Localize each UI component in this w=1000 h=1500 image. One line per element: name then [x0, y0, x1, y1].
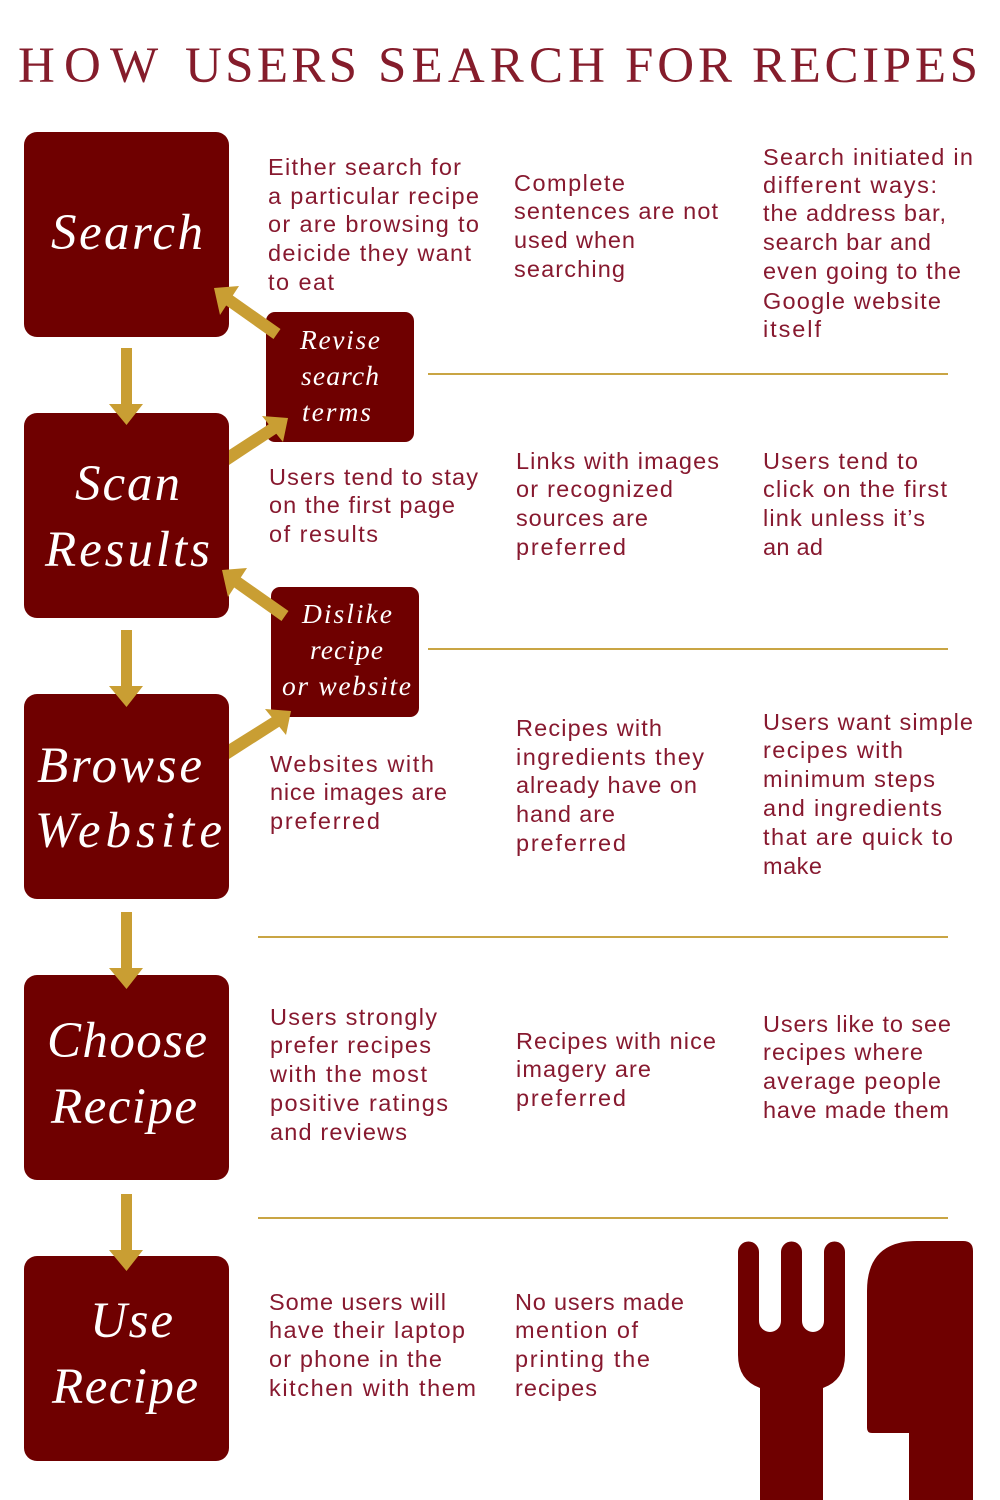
- text: search intent: Either search for: [268, 154, 461, 180]
- text: ingredients on hand: ingredients they: [516, 744, 704, 770]
- text: nice images: preferred: [270, 808, 380, 834]
- text: search initiation: the address bar,: [763, 200, 946, 226]
- arrow: Browse Website to Choose Recipe: [109, 912, 143, 989]
- text: first page: of results: [269, 521, 378, 547]
- icon: knife: [867, 1241, 973, 1500]
- text: simple recipes: Users want simple: [763, 709, 973, 735]
- step box: Choose Recipe: Recipe: [50, 1079, 197, 1135]
- step box: Browse Website: Website: [35, 803, 222, 859]
- text: simple recipes: recipes with: [763, 737, 903, 763]
- text: search intent: to eat: [268, 269, 334, 295]
- text: nice imagery: preferred: [516, 1085, 626, 1111]
- panel: Revise search terms: terms: [302, 396, 371, 427]
- text: links with images: Links with images: [516, 448, 719, 474]
- arrow: Choose Recipe to Use Recipe: [109, 1194, 143, 1271]
- step box: Scan Results: Results: [44, 522, 210, 578]
- text: search sentences: used when: [514, 227, 635, 253]
- title: USERS: [185, 38, 357, 94]
- text: first link: click on the first: [763, 476, 947, 502]
- text: average people: [763, 1011, 951, 1123]
- text: search initiation: different ways:: [763, 172, 937, 198]
- text: average people: have made them: [763, 1097, 949, 1123]
- panel: Revise search terms: search: [301, 360, 379, 391]
- panel: Revise search terms: [266, 312, 414, 442]
- text: nice imagery: Recipes with nice: [516, 1028, 716, 1054]
- title: FOR: [625, 38, 732, 94]
- text: laptop in kitchen: kitchen with them: [269, 1375, 476, 1401]
- text: no printing: printing the: [515, 1346, 650, 1372]
- text: laptop in kitchen: Some users will: [269, 1289, 446, 1315]
- text: ratings and reviews: [269, 1004, 448, 1145]
- text: search sentences: Complete: [514, 170, 625, 196]
- text: ingredients on hand: already have on: [516, 772, 697, 798]
- text: simple recipes: make: [763, 853, 822, 879]
- text: ingredients on hand: preferred: [516, 830, 626, 856]
- text: average people: Users like to see: [763, 1011, 951, 1037]
- text: first page: [269, 464, 478, 547]
- text: no printing: No users made: [515, 1289, 684, 1315]
- text: average people: average people: [763, 1068, 941, 1094]
- title: RECIPES: [752, 38, 978, 94]
- title: HOW: [18, 38, 159, 94]
- text: nice imagery: [516, 1028, 716, 1111]
- text: nice images: Websites with: [270, 751, 434, 777]
- text: search sentences: [514, 170, 718, 282]
- step box: Scan Results: Scan: [75, 456, 180, 512]
- text: first page: Users tend to stay: [269, 464, 478, 490]
- text: first link: Users tend to: [763, 448, 918, 474]
- text: simple recipes: that are quick to: [763, 824, 953, 850]
- arrow: Scan Results to Browse Website: [109, 630, 143, 707]
- text: laptop in kitchen: [269, 1289, 476, 1401]
- title: SEARCH: [378, 38, 605, 94]
- text: nice imagery: imagery are: [516, 1056, 651, 1082]
- text: search intent: or are browsing to: [268, 211, 479, 237]
- text: links with images: sources are: [516, 505, 648, 531]
- text: search initiation: Google website: [763, 288, 941, 314]
- text: search initiation: even going to the: [763, 258, 961, 284]
- step box: Choose Recipe: Choose: [47, 1013, 207, 1069]
- text: ratings and reviews: and reviews: [270, 1119, 407, 1145]
- text: simple recipes: minimum steps: [763, 766, 935, 792]
- text: average people: recipes where: [763, 1039, 923, 1065]
- text: ingredients on hand: hand are: [516, 801, 615, 827]
- step box: Search: [24, 132, 229, 337]
- text: search sentences: searching: [514, 256, 625, 282]
- text: search intent: deicide they want: [268, 240, 471, 266]
- panel: Revise search terms: Revise: [299, 324, 380, 355]
- step box: Search: Search: [51, 205, 203, 261]
- text: simple recipes: [763, 709, 973, 879]
- arrow: Scan Results to Revise: [229, 416, 288, 465]
- text: search initiation: [763, 144, 973, 342]
- arrow: Browse Website to Dislike: [229, 709, 291, 759]
- text: ratings and reviews: prefer recipes: [270, 1032, 431, 1058]
- step box: Scan Results: [24, 413, 229, 618]
- step box: Browse Website: [24, 694, 229, 899]
- panel: Dislike recipe or website: Dislike: [301, 598, 392, 629]
- text: ingredients on hand: Recipes with: [516, 715, 662, 741]
- step box: Browse Website: Browse: [37, 738, 202, 794]
- text: laptop in kitchen: or phone in the: [269, 1346, 442, 1372]
- step box: Use Recipe: Recipe: [51, 1359, 198, 1415]
- text: ratings and reviews: positive ratings: [270, 1090, 448, 1116]
- text: nice images: nice images are: [270, 779, 447, 805]
- icon: fork: [738, 1242, 845, 1500]
- text: search intent: a particular recipe: [268, 183, 479, 209]
- text: search initiation: itself: [763, 316, 821, 342]
- text: no printing: [515, 1289, 684, 1401]
- panel: Dislike recipe or website: [271, 587, 419, 717]
- step box: Use Recipe: Use: [90, 1293, 173, 1349]
- text: first link: link unless it’s: [763, 505, 925, 531]
- text: search initiation: Search initiated in: [763, 144, 973, 170]
- text: ingredients on hand: [516, 715, 704, 856]
- arrow: Dislike to Scan Results: [222, 568, 288, 621]
- title: [18, 38, 978, 94]
- text: no printing: mention of: [515, 1317, 638, 1343]
- text: first link: an ad: [763, 534, 823, 560]
- text: search intent: [268, 154, 479, 295]
- arrow: Search to Scan Results: [109, 348, 143, 425]
- text: nice images: [270, 751, 447, 834]
- text: search sentences: sentences are not: [514, 198, 718, 224]
- step box: Use Recipe: [24, 1256, 229, 1461]
- arrow: Revise to Search: [214, 286, 280, 339]
- text: first page: on the first page: [269, 492, 455, 518]
- step box: Choose Recipe: [24, 975, 229, 1180]
- text: first link: [763, 448, 947, 560]
- text: laptop in kitchen: have their laptop: [269, 1317, 465, 1343]
- text: search initiation: search bar and: [763, 229, 931, 255]
- text: links with images: preferred: [516, 534, 626, 560]
- text: no printing: recipes: [515, 1375, 597, 1401]
- text: simple recipes: and ingredients: [763, 795, 942, 821]
- text: links with images: [516, 448, 719, 560]
- text: ratings and reviews: Users strongly: [270, 1004, 437, 1030]
- panel: Dislike recipe or website: recipe: [310, 634, 383, 665]
- panel: Dislike recipe or website: or website: [282, 670, 411, 701]
- text: ratings and reviews: with the most: [269, 1061, 427, 1087]
- text: links with images: or recognized: [516, 476, 673, 502]
